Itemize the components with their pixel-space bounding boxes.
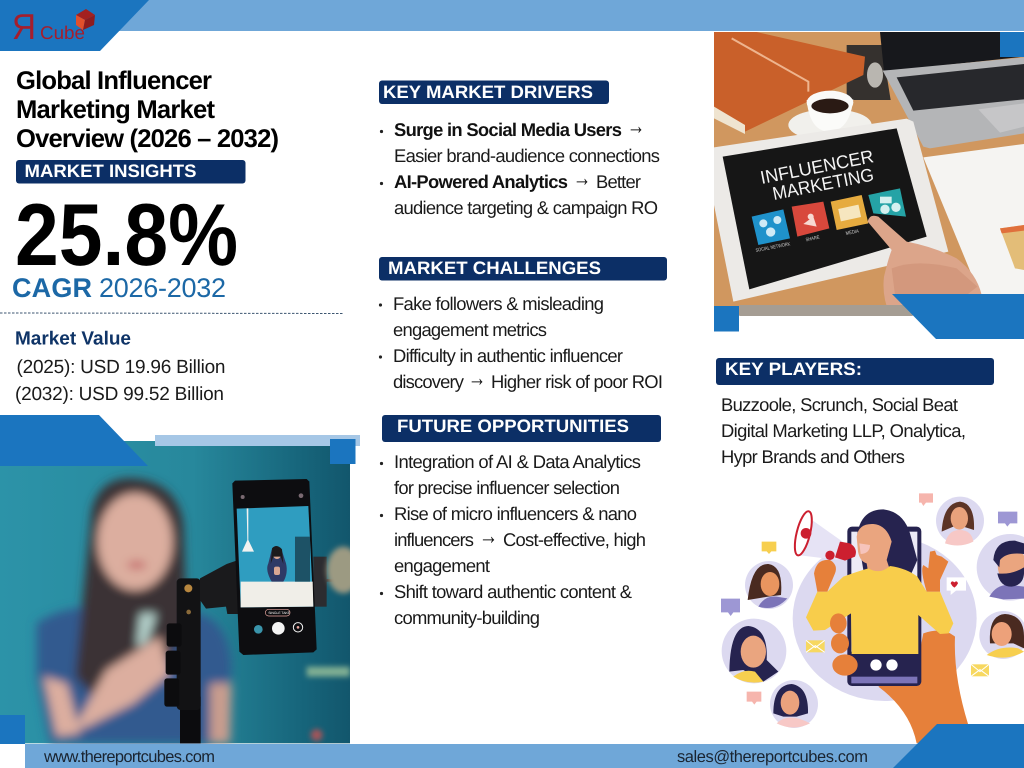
phone xyxy=(847,527,921,686)
opportunity list: Rise of micro influencers & nano xyxy=(394,503,637,524)
stat: CAGR: 25.8% xyxy=(15,185,238,284)
title: Global Influencer xyxy=(16,67,212,95)
phone camera controls xyxy=(241,493,303,635)
tablet tile captions: SHARE xyxy=(805,234,820,243)
heading: market challenges xyxy=(379,257,667,280)
pointing hand xyxy=(868,216,982,315)
accent: top right square xyxy=(1000,32,1024,57)
market value block xyxy=(15,328,226,405)
tablet xyxy=(714,119,948,302)
notebook xyxy=(714,32,865,134)
heading: future opportunities: FUTURE OPPORTUNITIES xyxy=(397,416,629,436)
key players text xyxy=(721,394,966,467)
driver list: Better xyxy=(596,171,641,192)
phone camera view xyxy=(237,506,313,607)
challenge list: Difficulty in authentic influencer xyxy=(393,345,623,366)
heading: key market drivers: KEY MARKET DRIVERS xyxy=(383,82,593,102)
tablet headline: MARKETING xyxy=(771,164,875,204)
footer: email: sales@thereportcubes.com xyxy=(677,748,868,766)
driver list: → xyxy=(627,112,645,140)
illustration: influencer with megaphone and followers xyxy=(721,493,1024,743)
big backdrop circle xyxy=(793,536,977,701)
heading: future opportunities xyxy=(382,415,661,442)
coffee cup xyxy=(788,90,872,135)
footer: website: www.thereportcubes.com xyxy=(43,748,215,766)
tablet tile captions: SOCIAL NETWORK xyxy=(755,241,791,253)
follower: bottom woman xyxy=(770,680,818,728)
influencer woman xyxy=(806,509,953,654)
tablet tiles xyxy=(752,188,906,245)
logo: wordmark: Cube xyxy=(40,22,85,43)
logo: cube xyxy=(76,9,95,30)
megaphone xyxy=(791,510,856,592)
challenge list: Higher risk of poor ROI xyxy=(491,371,663,392)
laptop xyxy=(880,32,1024,148)
accent: photo bottom left square xyxy=(0,715,25,744)
opportunity list: Integration of AI & Data Analytics xyxy=(394,451,641,472)
title: Overview (2026 – 2032) xyxy=(16,125,279,153)
challenge list: Fake followers & misleading xyxy=(393,293,604,314)
top banner bar xyxy=(90,0,1024,31)
key players text: Hypr Brands and Others xyxy=(721,446,905,467)
key players text: Digital Marketing LLP, Onalytica, xyxy=(721,420,966,441)
logo: wordmark xyxy=(12,6,85,47)
panel: future opportunities xyxy=(380,415,661,628)
hand holding phone xyxy=(878,631,968,743)
phone body xyxy=(232,479,317,655)
driver list: Surge in Social Media Users xyxy=(394,119,622,140)
opportunity list: engagement xyxy=(394,555,490,576)
logo: wordmark: R xyxy=(12,6,36,47)
panel: market challenges xyxy=(379,257,667,392)
tablet tile captions: MEDIA xyxy=(845,228,859,236)
driver list: AI-Powered Analytics xyxy=(394,171,568,192)
heading: market insights: MARKET INSIGHTS xyxy=(24,161,196,181)
blurred background objects xyxy=(307,547,360,741)
stat: CAGR: CAGR xyxy=(12,273,92,303)
panel: key market drivers xyxy=(379,80,660,218)
accent: left blue banner shape xyxy=(0,415,148,466)
driver list: → xyxy=(573,164,591,192)
challenge list: engagement metrics xyxy=(393,319,547,340)
follower: right woman xyxy=(979,611,1024,659)
follower: left top woman xyxy=(745,561,793,609)
accent: photo bottom left square xyxy=(714,306,739,332)
opportunity list: for precise influencer selection xyxy=(394,477,620,498)
accent: photo top right square xyxy=(330,439,356,464)
heading: market insights xyxy=(16,160,246,184)
footer xyxy=(25,724,1024,768)
challenge list: → xyxy=(468,364,486,392)
accent: light bar over photo xyxy=(155,435,360,446)
holding fingers xyxy=(830,613,858,676)
blurred woman xyxy=(37,478,232,743)
driver list: Easier brand-audience connections xyxy=(394,145,660,166)
title xyxy=(16,67,279,153)
tablet headline xyxy=(760,150,874,200)
logo panel xyxy=(0,0,149,51)
follower: bearded man xyxy=(977,534,1024,601)
driver list xyxy=(380,112,660,218)
driver list: audience targeting & campaign RO xyxy=(394,197,658,218)
follower: left large woman xyxy=(722,619,786,683)
chat badges xyxy=(721,493,1017,705)
stat: CAGR: 2026-2032 xyxy=(99,273,226,303)
opportunity list: Shift toward authentic content & xyxy=(394,581,632,602)
tablet headline: INFLUENCER xyxy=(758,146,875,188)
key players text: Buzzoole, Scrunch, Social Beat xyxy=(721,394,958,415)
tripod xyxy=(164,557,340,743)
envelopes xyxy=(806,640,989,676)
photo: tablet showing influencer marketing xyxy=(714,32,1024,317)
opportunity list: community-building xyxy=(394,607,540,628)
challenge list xyxy=(379,293,663,392)
accent: photo bottom right shape xyxy=(892,294,1024,339)
title: Marketing Market xyxy=(16,96,215,124)
heading: key players xyxy=(716,358,994,385)
photo: woman recording with smartphone on tripod xyxy=(0,440,360,743)
heading: market challenges: MARKET CHALLENGES xyxy=(388,258,601,278)
phone camera controls: SINGLE TAKE xyxy=(268,611,290,615)
opportunity list xyxy=(380,451,646,628)
heading: key players: KEY PLAYERS: xyxy=(725,359,862,379)
follower: top right woman xyxy=(936,497,984,545)
paper xyxy=(923,144,1024,295)
opportunity list: Cost-effective, high xyxy=(503,529,646,550)
market value block: (2032): USD 99.52 Billion xyxy=(15,384,224,405)
challenge list: discovery xyxy=(393,371,465,392)
tablet tile captions xyxy=(755,228,859,253)
opportunity list: influencers xyxy=(394,529,474,550)
opportunity list: → xyxy=(479,522,498,550)
market value block: Market Value xyxy=(15,328,131,350)
market value block: (2025): USD 19.96 Billion xyxy=(16,357,226,378)
